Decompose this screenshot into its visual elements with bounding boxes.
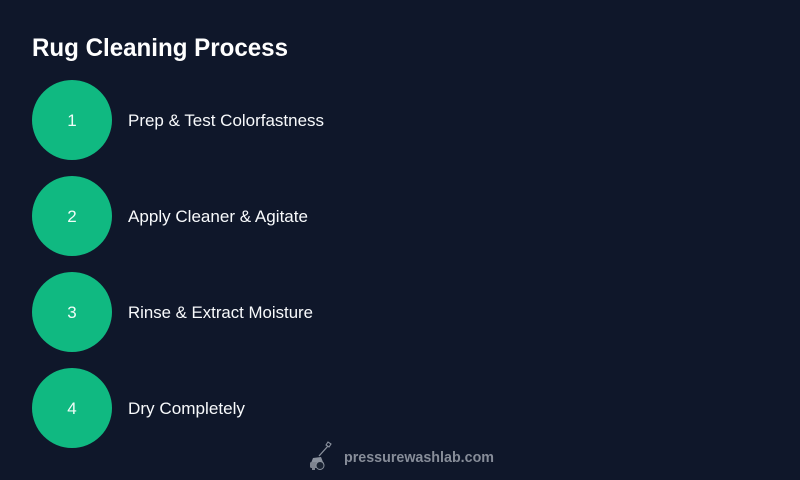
step 4: Dry Completely: [128, 399, 245, 418]
title: Rug Cleaning Process: [32, 34, 288, 62]
step 2: [32, 176, 308, 256]
step 1: [32, 80, 324, 160]
step 1: Prep & Test Colorfastness: [128, 111, 324, 130]
footer brand text: pressurewashlab.com: [344, 450, 494, 466]
step 3: 3: [67, 303, 77, 322]
step 1: 1: [67, 111, 77, 130]
step 3: Rinse & Extract Moisture: [128, 303, 313, 322]
step 4: 4: [67, 399, 77, 418]
icon: pressure washer: [310, 442, 331, 470]
step 2: 2: [67, 207, 77, 226]
step 2: Apply Cleaner & Agitate: [128, 207, 308, 226]
step 3: [32, 272, 313, 352]
step 4: [32, 368, 245, 448]
